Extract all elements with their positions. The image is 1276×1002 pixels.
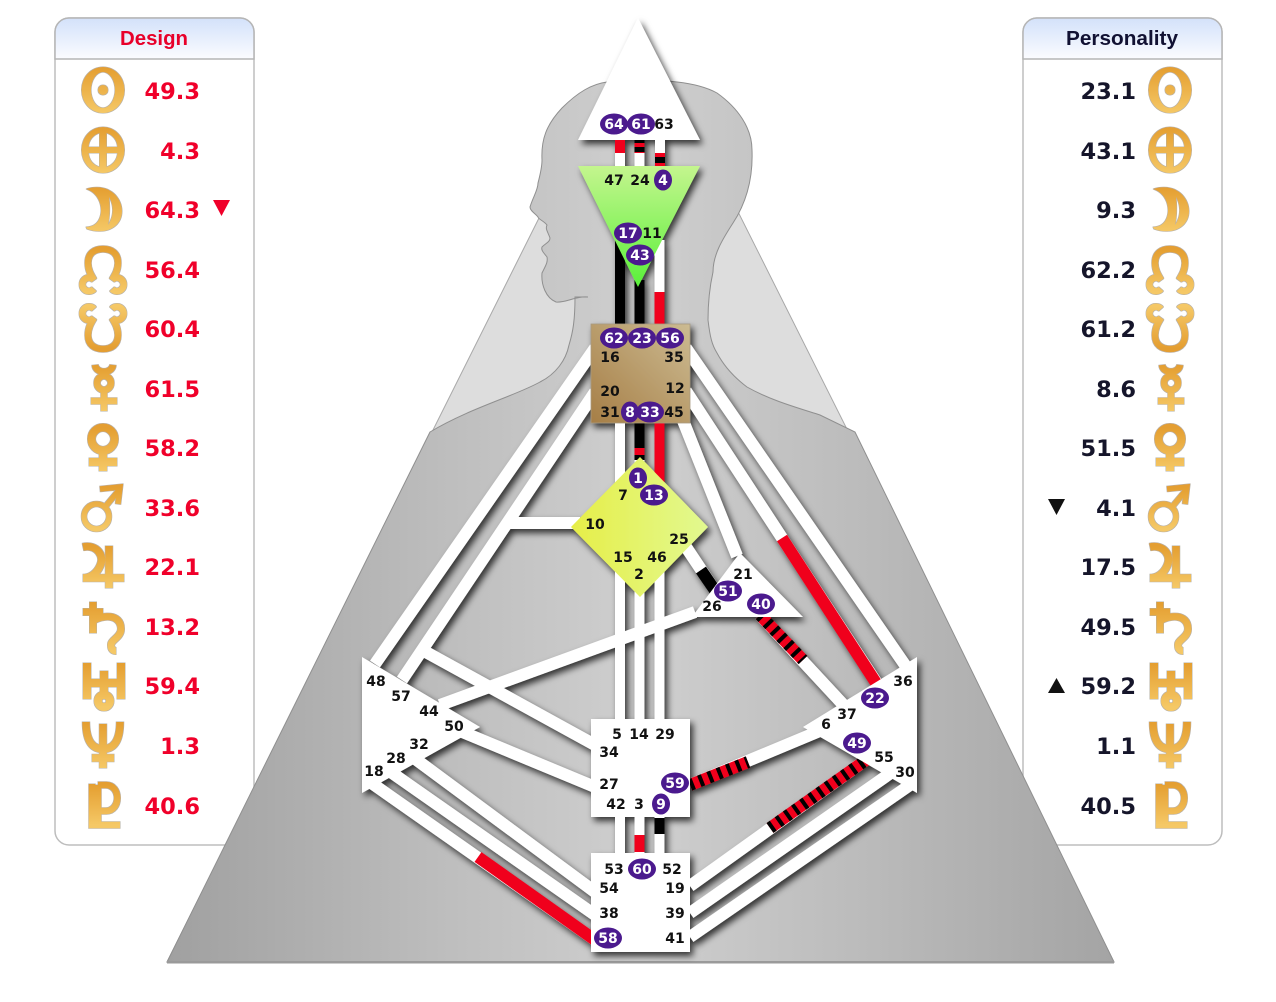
design gate values: 59.4	[144, 674, 200, 700]
gate labels: solar plexus: 37	[837, 707, 857, 723]
design gate values: 4.3	[160, 139, 200, 165]
design gate values: 13.2	[144, 615, 200, 641]
gate labels: throat: 31	[600, 405, 620, 421]
icon: mercury	[91, 365, 117, 411]
icon: design moon detriment arrow	[213, 200, 230, 216]
icon: moon	[86, 187, 122, 231]
gate labels: spleen: 48	[366, 674, 386, 690]
gate labels: ajna: 17	[618, 226, 638, 242]
design gate values: 22.1	[144, 555, 200, 581]
gate labels: solar plexus: 30	[895, 765, 915, 781]
gate labels: sacral: 29	[655, 727, 675, 743]
design gate values: 58.2	[144, 436, 200, 462]
centre: sacral	[591, 719, 690, 817]
icon: venus	[89, 428, 117, 471]
gate labels: G: 7	[618, 488, 628, 504]
gate labels: G: 15	[613, 550, 633, 566]
gate labels: ajna: 4	[658, 173, 668, 189]
icon: saturn	[1150, 602, 1188, 651]
gate labels: heart: 51	[718, 584, 738, 600]
gate labels: solar plexus: 49	[847, 736, 867, 752]
gate labels: sacral: 9	[656, 797, 666, 813]
personality planet icons	[1148, 67, 1192, 825]
personality gate values: 4.1	[1096, 496, 1136, 522]
gate labels: ajna: 24	[630, 173, 650, 189]
centre: spleen	[362, 657, 480, 793]
design gate values: 33.6	[144, 496, 200, 522]
gate labels: spleen: 18	[364, 764, 384, 780]
gate labels: spleen: 32	[409, 737, 429, 753]
design gate values: 40.6	[144, 794, 200, 820]
icon: uranus	[87, 663, 121, 707]
panel: Design	[55, 18, 254, 845]
design gate values: 60.4	[144, 317, 200, 343]
personality gate values: 49.5	[1080, 615, 1136, 641]
centre: G	[571, 457, 708, 597]
gate labels: sacral: 42	[606, 797, 626, 813]
icon: south node	[82, 307, 124, 349]
personality gate values: 9.3	[1096, 198, 1136, 224]
heading: Design: Design	[120, 28, 188, 50]
centre: ajna	[578, 166, 700, 287]
gate labels: sacral: 14	[629, 727, 649, 743]
design gate values: 1.3	[160, 734, 200, 760]
centre: throat	[591, 324, 690, 423]
icon: saturn	[83, 602, 121, 651]
icon: north node	[82, 249, 124, 291]
icon: neptune	[1153, 722, 1187, 768]
gate labels: throat: 62	[604, 331, 624, 347]
icon: venus	[1156, 428, 1184, 471]
gate labels: sacral: 3	[634, 797, 644, 813]
gate labels: root: 39	[665, 906, 685, 922]
gate labels: sacral: 59	[665, 776, 685, 792]
icon: earth	[82, 127, 124, 173]
design planet icons	[82, 67, 124, 825]
gate labels: root: 41	[665, 931, 685, 947]
personality gate values: 23.1	[1080, 79, 1136, 105]
gate labels: head: 64	[604, 117, 624, 133]
icon: jupiter	[83, 546, 124, 588]
gate labels: throat: 12	[665, 381, 685, 397]
gate labels: G: 2	[634, 567, 644, 583]
gate labels: root: 38	[599, 906, 619, 922]
gate labels: sacral	[599, 727, 689, 814]
background triangle	[167, 96, 1114, 962]
gate labels: root: 54	[599, 881, 619, 897]
gate labels: ajna	[604, 170, 672, 266]
gate labels: spleen: 28	[386, 751, 406, 767]
gate labels: heart: 40	[751, 597, 771, 613]
human silhouette: head and body	[167, 78, 1114, 962]
gate labels: solar plexus	[821, 674, 915, 781]
centre: heart	[692, 553, 803, 617]
icon: sun	[82, 67, 124, 113]
icon: neptune	[86, 722, 120, 768]
design gate values: 64.3	[144, 198, 200, 224]
gate labels: solar plexus: 36	[893, 674, 913, 690]
icon: moon	[1153, 187, 1189, 231]
design gate values	[144, 79, 200, 820]
gate labels: sacral: 34	[599, 745, 619, 761]
gate labels: root: 60	[632, 862, 652, 878]
gate labels: throat: 56	[660, 331, 680, 347]
gate labels: ajna: 11	[642, 226, 662, 242]
personality gate values: 61.2	[1080, 317, 1136, 343]
gate labels: throat: 35	[664, 350, 684, 366]
gate labels: solar plexus: 22	[865, 691, 885, 707]
icon: mars	[84, 487, 120, 529]
gate labels: heart: 26	[702, 599, 722, 615]
gate labels: head	[600, 114, 674, 134]
icon: personality uranus exaltation arrow	[1048, 678, 1065, 693]
gate labels: sacral: 5	[612, 727, 622, 743]
gate labels: ajna: 43	[630, 248, 650, 264]
icon: jupiter	[1150, 546, 1191, 588]
personality gate values: 51.5	[1080, 436, 1136, 462]
personality gate values: 62.2	[1080, 258, 1136, 284]
panel: Personality	[1023, 18, 1222, 845]
personality gate values: 40.5	[1080, 794, 1136, 820]
design gate values: 49.3	[144, 79, 200, 105]
gate labels: solar plexus: 6	[821, 717, 831, 733]
gate labels: root: 19	[665, 881, 685, 897]
bottom edge line	[167, 961, 1114, 964]
icon: uranus	[1154, 663, 1188, 707]
gate labels: root	[594, 858, 685, 948]
gate labels: G: 10	[585, 517, 605, 533]
personality gate values: 59.2	[1080, 674, 1136, 700]
gate labels: root: 53	[604, 862, 624, 878]
gate labels: G	[585, 468, 689, 583]
heading: Personality: Personality	[1066, 28, 1179, 50]
icon: pluto	[1159, 784, 1187, 825]
centre: solar plexus	[803, 657, 917, 793]
personality gate values: 8.6	[1096, 377, 1136, 403]
gate labels: throat: 8	[625, 405, 635, 421]
gate labels: spleen	[364, 674, 464, 780]
channel activations: red, black and striped segments	[478, 140, 878, 940]
icon: earth	[1148, 127, 1192, 173]
icon: mercury	[1158, 365, 1184, 411]
channels: white base lines	[370, 135, 910, 940]
personality gate values: 1.1	[1096, 734, 1136, 760]
gate labels: heart: 21	[733, 567, 753, 583]
icon: pluto	[92, 784, 120, 825]
icon: sun	[1148, 67, 1192, 113]
gate labels: ajna: 47	[604, 173, 624, 189]
design gate values: 56.4	[144, 258, 200, 284]
gate labels: heart	[702, 567, 775, 615]
centre: head	[578, 18, 700, 140]
personality gate values: 17.5	[1080, 555, 1136, 581]
gate labels: head: 63	[654, 117, 674, 133]
gate labels: spleen: 50	[444, 719, 464, 735]
icon: north node	[1149, 249, 1191, 291]
gate labels: throat: 20	[600, 384, 620, 400]
gate labels: throat: 23	[632, 331, 652, 347]
gate labels: throat	[600, 328, 685, 422]
gate labels: head: 61	[631, 117, 651, 133]
centre: root	[591, 853, 690, 952]
gate labels: root: 52	[662, 862, 682, 878]
personality gate values: 43.1	[1080, 139, 1136, 165]
icon: personality mars detriment arrow	[1048, 499, 1065, 515]
gate labels: throat: 33	[640, 405, 660, 421]
gate labels: G: 46	[647, 550, 667, 566]
personality gate values	[1080, 79, 1136, 820]
icon: mars	[1151, 487, 1187, 529]
gate labels: throat: 16	[600, 350, 620, 366]
gate labels: spleen: 57	[391, 689, 411, 705]
gate labels: root: 58	[598, 931, 618, 947]
gate labels: G: 1	[633, 471, 643, 487]
gate labels: solar plexus: 55	[874, 750, 894, 766]
gate labels: throat: 45	[664, 405, 684, 421]
channels and centres with drop shadow	[362, 18, 917, 952]
icon: south node	[1149, 307, 1191, 349]
design gate values: 61.5	[144, 377, 200, 403]
gate labels: G: 25	[669, 532, 689, 548]
gate labels: sacral: 27	[599, 777, 619, 793]
gate labels: G: 13	[644, 488, 664, 504]
gate labels: spleen: 44	[419, 704, 439, 720]
